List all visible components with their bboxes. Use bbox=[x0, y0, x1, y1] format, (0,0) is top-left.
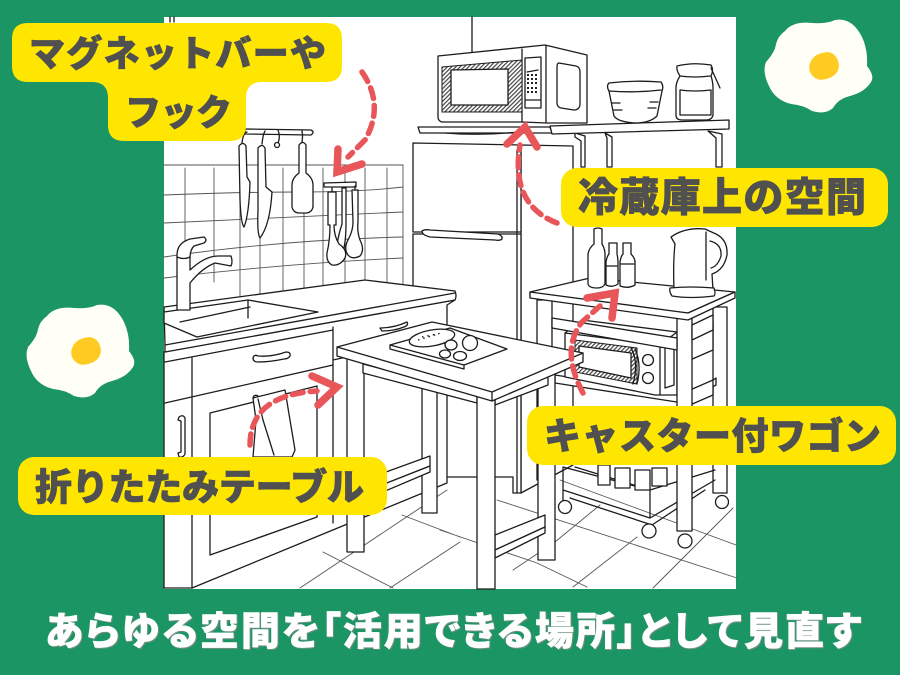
wagon back legs and shelf bbox=[537, 300, 727, 493]
title: あらゆる空間を「活用できる場所」として見直す bbox=[45, 611, 861, 654]
wagon front leg and top bbox=[530, 278, 735, 531]
towel bbox=[253, 390, 295, 457]
icon: fried egg top right bbox=[765, 20, 872, 112]
bowl bbox=[608, 81, 663, 123]
hook rail with ladles bbox=[324, 182, 362, 265]
microwave bbox=[438, 45, 587, 123]
toaster oven bbox=[565, 320, 677, 395]
icon: fried egg left bbox=[27, 305, 134, 397]
floor tiles bbox=[300, 480, 737, 588]
label: magnet bar and hooks bbox=[12, 23, 342, 141]
wall tiles bbox=[164, 165, 403, 300]
label: folding table bbox=[18, 457, 387, 515]
arrow: to hook rail bbox=[337, 72, 374, 172]
panel: kitchen illustration bbox=[164, 17, 737, 589]
folding table bbox=[337, 322, 583, 589]
refrigerator bbox=[413, 143, 573, 493]
label: wagon with casters bbox=[527, 406, 896, 465]
glass jar bbox=[676, 64, 720, 120]
label: wagon with casters: キャスター付ワゴン bbox=[544, 415, 881, 457]
cabinets bbox=[164, 300, 455, 588]
label: magnet bar and hooks: フック bbox=[125, 92, 232, 133]
label: magnet bar and hooks: マグネットバーや bbox=[29, 33, 326, 74]
label: folding table: 折りたたみテーブル bbox=[35, 466, 364, 508]
shelf and brackets bbox=[418, 120, 729, 167]
magnet bar with knives and spatula bbox=[239, 129, 313, 238]
electric kettle bbox=[670, 229, 727, 298]
cutting board with cucumber bbox=[390, 326, 507, 369]
bottles bbox=[588, 228, 635, 288]
wagon basket and casters bbox=[558, 465, 728, 548]
label: space above refrigerator bbox=[561, 168, 888, 227]
faucet bbox=[177, 237, 232, 310]
arrow: to wagon top bbox=[571, 293, 615, 393]
counter and sink bbox=[164, 280, 456, 352]
label: space above refrigerator: 冷蔵庫上の空間 bbox=[578, 176, 866, 220]
arrow: to top of refrigerator bbox=[507, 127, 557, 223]
arrow: to folding table bbox=[250, 376, 337, 445]
